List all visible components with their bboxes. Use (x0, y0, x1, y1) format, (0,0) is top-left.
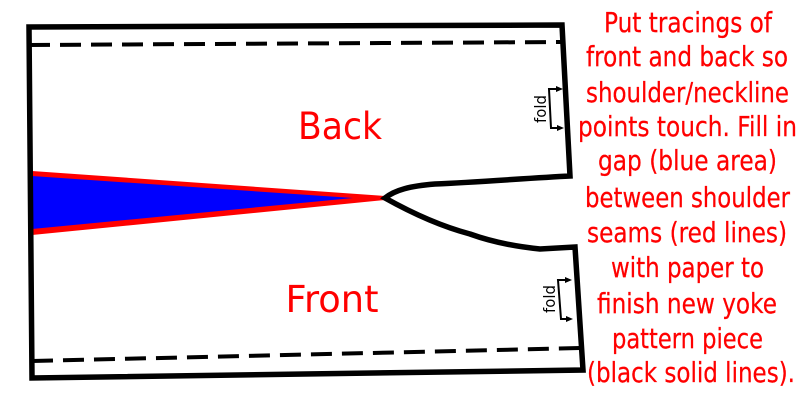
instructions text (578, 6, 797, 389)
bottom dashed line (32, 348, 582, 361)
label: Back: Back (298, 105, 383, 148)
label: Front: Front (286, 278, 378, 321)
instructions text: pattern piece (612, 322, 763, 355)
fold marker: back (531, 86, 564, 131)
fold marker: back: fold (531, 95, 550, 123)
fold marker: front (540, 277, 573, 322)
pattern outline: black solid lines (29, 25, 583, 378)
fold marker: front: fold (540, 285, 559, 313)
top dashed line (29, 42, 564, 45)
instructions text: with paper to (611, 251, 764, 284)
shoulder gap: blue area with red seam lines (32, 171, 385, 235)
